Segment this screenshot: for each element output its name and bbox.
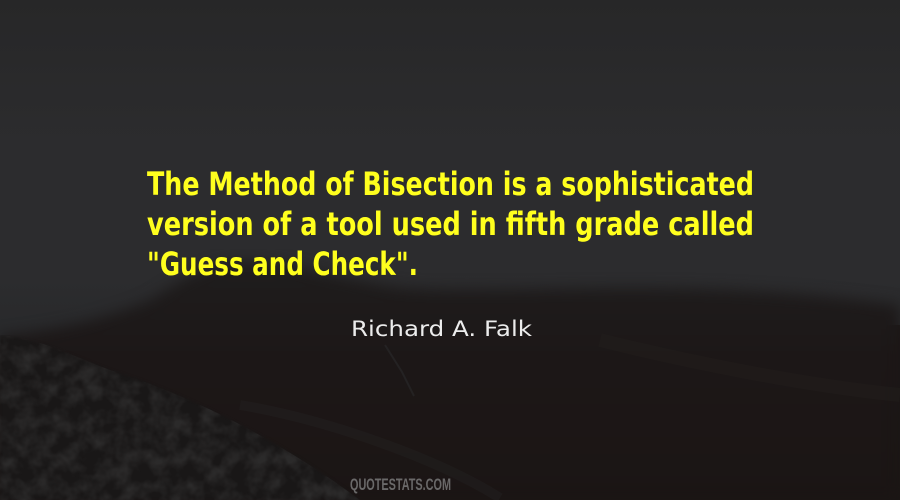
quote text: "Guess and Check". — [147, 245, 418, 283]
author name: Richard A. Falk — [351, 317, 533, 341]
quote text: version of a tool used in fifth grade called — [147, 205, 754, 243]
background: mountain landscape — [0, 261, 900, 500]
quote text — [147, 165, 754, 283]
quote text: The Method of Bisection is a sophisticated — [147, 165, 754, 203]
site watermark: QUOTESTATS.COM — [350, 475, 451, 494]
